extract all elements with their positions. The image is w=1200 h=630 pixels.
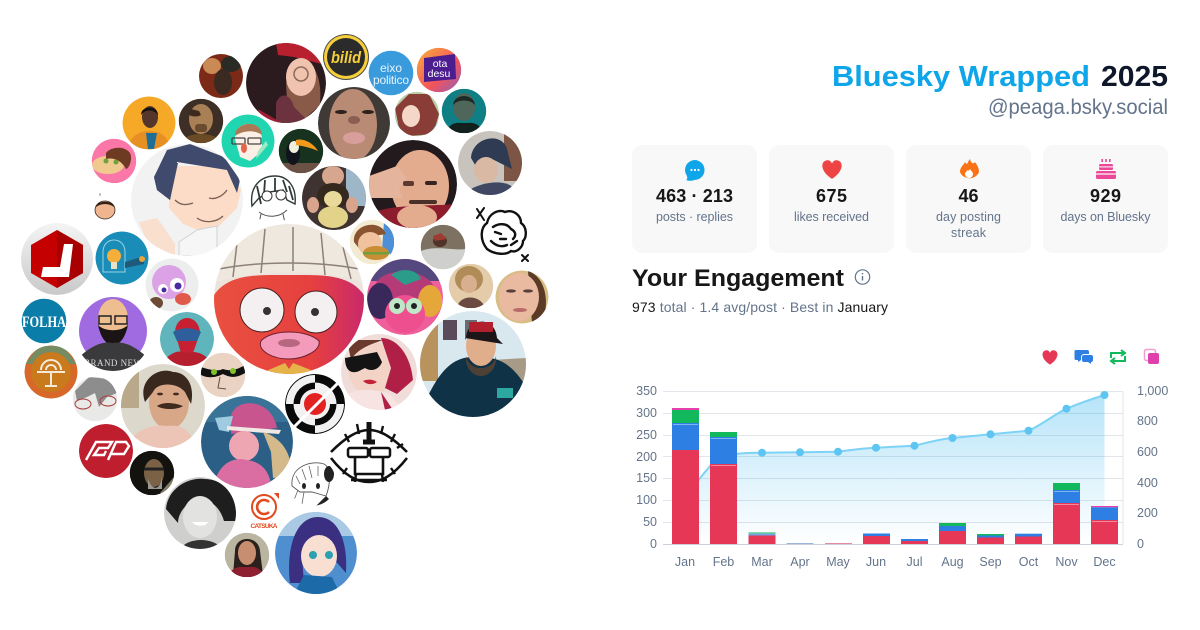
- stat card: days on Bluesky: 929: [1090, 186, 1121, 206]
- month labels: [675, 555, 1116, 569]
- avatar: woman in red cap: [246, 43, 326, 123]
- avatar: man in red cap: [420, 311, 526, 417]
- icon: cake: [1096, 159, 1116, 179]
- month labels: Nov: [1055, 555, 1078, 569]
- avatar: FOLHA logo: [22, 299, 66, 343]
- month labels: Apr: [790, 555, 810, 569]
- avatar: otadesu logo: [417, 48, 461, 92]
- right axis labels: 0: [1137, 537, 1144, 551]
- avatar: eixo politico logo: politico: [373, 73, 409, 87]
- left axis labels: 350: [636, 384, 657, 398]
- avatar: curly blonde: [449, 264, 493, 308]
- right axis labels: 800: [1137, 414, 1158, 428]
- avatar: woman closeup: [496, 270, 548, 324]
- stat card: posts and replies: [632, 145, 757, 253]
- left axis labels: [636, 384, 657, 551]
- month labels: Jan: [675, 555, 695, 569]
- avatar: eixo politico logo: [369, 51, 413, 95]
- right axis labels: 600: [1137, 445, 1158, 459]
- avatar: blue haired anime girl: [275, 512, 357, 594]
- engagement chart: [636, 384, 1168, 569]
- avatar: man in orange jacket: [122, 96, 176, 150]
- avatar: bulb in birdcage: [96, 232, 148, 284]
- month labels: Mar: [751, 555, 773, 569]
- avatar: eyepatch man: [179, 99, 223, 143]
- legend icon: quotes: [1144, 350, 1159, 364]
- stat card: days on Bluesky: [1043, 145, 1168, 253]
- title: Bluesky Wrapped: [832, 61, 1090, 93]
- right axis labels: 1,000: [1137, 384, 1168, 398]
- avatar: red haired anime girl: [395, 92, 439, 136]
- legend icon: replies: [1074, 350, 1093, 364]
- avatar: glasses cartoon on teal: [222, 114, 274, 168]
- stat card: day posting streak: 46: [958, 186, 978, 206]
- handle: @peaga.bsky.social: [988, 96, 1168, 119]
- title: 2025: [1101, 61, 1168, 93]
- heading: Your Engagement: Your Engagement: [632, 265, 844, 292]
- avatar: big anime man closed eyes: [131, 144, 243, 256]
- avatar: cartoon on pink: [92, 139, 136, 183]
- avatar: chun li burger: [350, 220, 394, 264]
- month labels: Jul: [907, 555, 922, 569]
- avatar: black and white woman: [164, 477, 236, 549]
- avatar: black ink doodle face: [477, 208, 528, 261]
- avatar: dark red pet: [199, 54, 243, 98]
- avatar: manga headphones: [291, 462, 334, 506]
- avatar: woman sunglasses scarf: [341, 334, 417, 410]
- bar: Jan: [672, 408, 699, 544]
- stat card: posts and replies: 463 · 213: [656, 186, 733, 206]
- left axis labels: 100: [636, 493, 657, 507]
- stacked bars: [672, 408, 1118, 544]
- icon: speech bubble: [685, 160, 705, 181]
- avatar: smiling woman: [225, 533, 269, 577]
- month labels: Dec: [1093, 555, 1116, 569]
- avatar cloud: [21, 34, 548, 594]
- avatar: man lying down: [421, 225, 465, 269]
- bar: Jul: [901, 539, 928, 544]
- avatar: catsuka logo: CATSUKA: [250, 523, 278, 530]
- month labels: Sep: [979, 555, 1002, 569]
- bar: Jun: [863, 534, 890, 544]
- avatar: red target logo: [285, 374, 345, 434]
- stat card: days on Bluesky: days on Bluesky: [1060, 210, 1151, 224]
- stat card: day posting streak: [906, 145, 1031, 253]
- icon: info: [855, 270, 870, 284]
- avatar: red masked hero: [160, 312, 214, 366]
- avatar: bilid logo: bilid: [331, 48, 362, 67]
- stat card: likes received: [769, 145, 894, 253]
- month labels: Jun: [866, 555, 886, 569]
- bar: Dec: [1091, 506, 1118, 544]
- avatar: pink hat character: [367, 259, 443, 335]
- avatar: tiny face: [83, 182, 127, 226]
- avatar: eixo politico logo: eixo: [380, 61, 402, 75]
- bar: Aug: [939, 523, 966, 544]
- legend icon: reposts: [1111, 350, 1125, 364]
- left axis labels: 200: [636, 450, 657, 464]
- avatar: woman tongue out: [318, 87, 390, 161]
- right axis labels: 200: [1137, 506, 1158, 520]
- stat card: likes received: 675: [816, 186, 847, 206]
- avatar: GP red logo: [79, 424, 133, 478]
- left axis labels: 300: [636, 406, 657, 420]
- avatar: catsuka logo: [242, 489, 286, 533]
- avatar: curly mustache man: [121, 364, 205, 448]
- month labels: Oct: [1019, 555, 1039, 569]
- bar: Feb: [710, 432, 737, 544]
- cumulative area and line: [685, 391, 1108, 544]
- icon: heart: [822, 160, 842, 179]
- avatar: bilid logo: [323, 34, 369, 80]
- avatar: woman on teal: [442, 89, 486, 133]
- grid lines: [663, 391, 1123, 544]
- legend icon: likes: [1043, 350, 1057, 365]
- left axis labels: 0: [650, 537, 657, 551]
- engagement summary: 973 total · 1.4 avg/post · Best in January: [632, 299, 888, 315]
- avatar: bearded cartoon man: BRAND NEW: [84, 358, 142, 368]
- right axis labels: 400: [1137, 476, 1158, 490]
- month labels: Aug: [941, 555, 964, 569]
- bar: Apr: [786, 543, 814, 544]
- avatar: bearded cartoon man: [79, 297, 147, 371]
- right axis labels: [1137, 384, 1168, 551]
- avatar: man v sign: [369, 140, 457, 229]
- avatar: eye with finger doodle: [331, 422, 407, 482]
- stat card: likes received: likes received: [794, 210, 869, 224]
- stat card: day posting streak: day posting: [936, 210, 1001, 224]
- avatar: gray haired glasses: [73, 377, 117, 421]
- avatar: main red character with beanie: [214, 224, 364, 374]
- bar: Mar: [748, 532, 776, 544]
- avatar: toucan: [279, 129, 323, 173]
- month labels: Feb: [713, 555, 734, 569]
- bar: Oct: [1015, 534, 1042, 544]
- avatar: gray anime man: [458, 131, 522, 195]
- stat card: posts and replies: posts · replies: [656, 210, 733, 224]
- avatar: woman holding bear: [302, 166, 366, 230]
- avatar: orange antenna logo: [24, 346, 78, 398]
- avatar: J hexagon logo: [21, 223, 93, 295]
- bar: Sep: [977, 534, 1004, 544]
- icon: flame: [960, 159, 979, 178]
- left axis labels: 150: [636, 471, 657, 485]
- bar: Nov: [1053, 483, 1080, 544]
- avatar: FOLHA logo: FOLHA: [22, 314, 66, 331]
- stat card: day posting streak: streak: [951, 226, 987, 240]
- month labels: May: [826, 555, 851, 569]
- avatar: otadesu logo: ota: [433, 58, 447, 70]
- avatar: sketch girl: [250, 175, 296, 220]
- avatar: pink ball creature: [146, 258, 198, 312]
- left axis labels: 250: [636, 428, 657, 442]
- left axis labels: 50: [643, 515, 657, 529]
- avatar: dark glasses man: [130, 451, 174, 495]
- avatar: pink helmet lady: [201, 396, 293, 488]
- chart legend: [1043, 350, 1159, 365]
- avatar: green eye mask: [201, 353, 245, 397]
- bar: May: [825, 543, 852, 544]
- avatar: otadesu logo: desu: [428, 68, 451, 80]
